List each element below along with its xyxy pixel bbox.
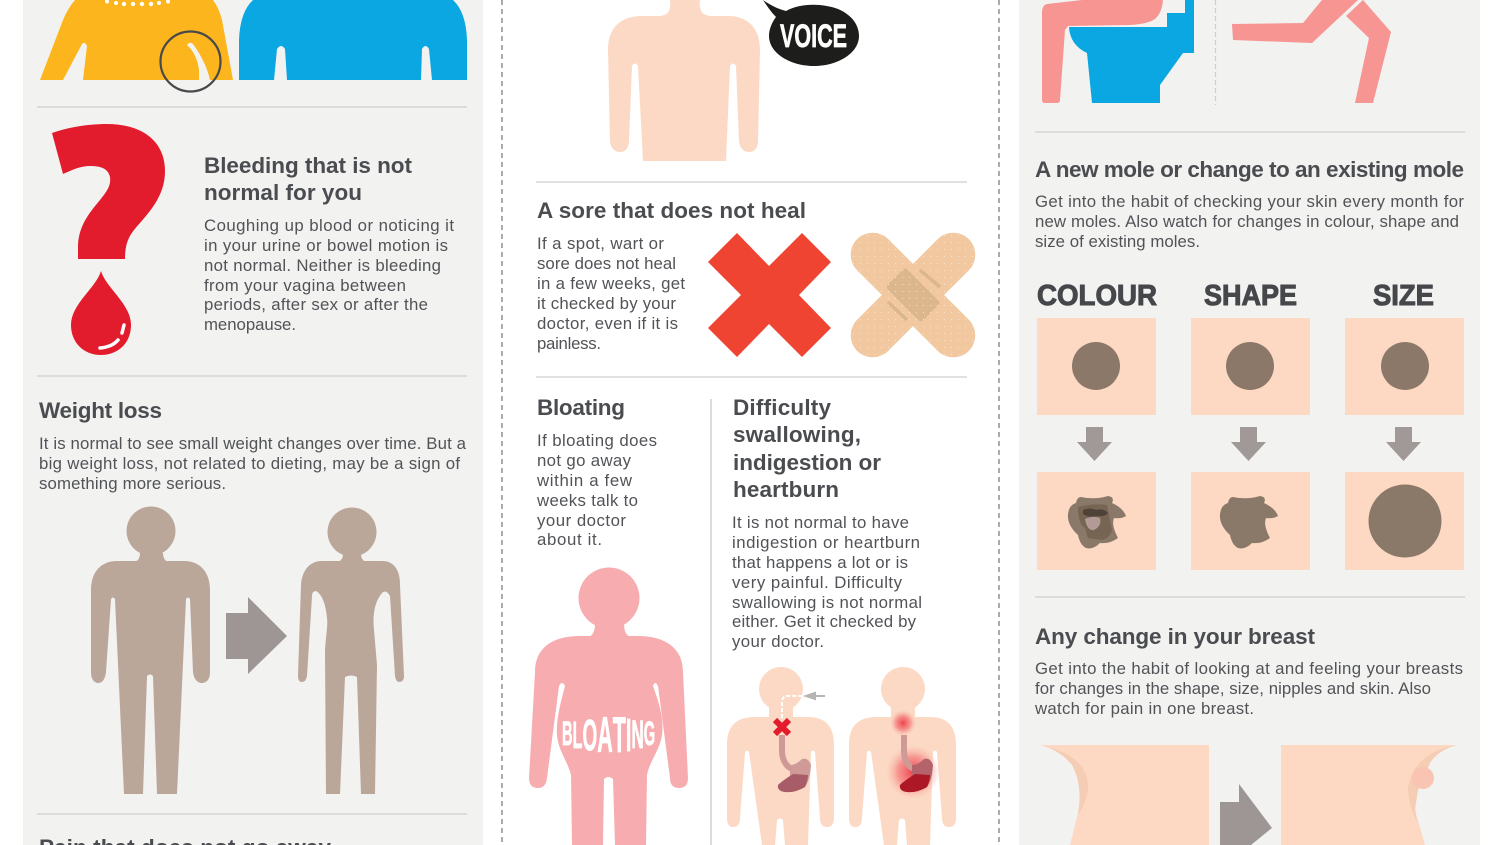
text: breast description: watch for pain in one breast. xyxy=(1034,699,1254,718)
icon: figure with swallowing difficulty xyxy=(727,667,834,845)
icon: crossed plasters xyxy=(842,224,984,366)
icon: bloated figure: N xyxy=(631,712,644,757)
callout: voice speech bubble xyxy=(763,0,859,66)
text: bleeding description: periods, after sex or after the xyxy=(204,295,428,314)
panel: right column xyxy=(1019,0,1480,845)
text: bleeding description xyxy=(204,216,454,334)
panel: left column xyxy=(23,0,483,845)
mole chart: colour xyxy=(1037,280,1157,570)
icon: red cross xyxy=(708,233,831,357)
icon: legs xyxy=(1232,0,1391,103)
text: sore description xyxy=(537,234,685,353)
text: bloating description: weeks talk to xyxy=(536,491,638,510)
text: bloating description: your doctor xyxy=(537,511,626,530)
heading: difficulty swallowing: heartburn xyxy=(733,477,839,502)
callout: voice speech bubble: VOICE xyxy=(780,18,847,54)
text: bloating description: about it. xyxy=(537,530,602,549)
text: bloating description: If bloating does xyxy=(537,431,657,450)
text: bleeding description: menopause. xyxy=(204,315,296,334)
icon: bloated figure: I xyxy=(626,709,631,761)
icon: changed breast with lump xyxy=(1281,745,1457,845)
icon: figure with heartburn xyxy=(849,667,956,845)
mole chart: colour: COLOUR xyxy=(1037,280,1157,312)
heading: mole: A new mole or change to an existing mole xyxy=(1035,157,1464,182)
text: bleeding description: in your urine or bowel motion is xyxy=(204,236,448,255)
arrow: breast change xyxy=(1220,784,1272,845)
heading: difficulty swallowing: indigestion or xyxy=(733,450,881,475)
text: weight loss description xyxy=(39,434,467,493)
text: difficulty swallowing description: very painful. Difficulty xyxy=(732,573,903,592)
text: difficulty swallowing description: that happens a lot or is xyxy=(732,553,908,572)
heading: difficulty swallowing: swallowing, xyxy=(733,422,861,447)
icon: bloated figure: O xyxy=(583,711,597,760)
text: difficulty swallowing description: your doctor. xyxy=(732,632,824,651)
text: difficulty swallowing description: It is not normal to have xyxy=(732,513,909,532)
heading: bloating: Bloating xyxy=(537,395,625,420)
mole chart: shape: SHAPE xyxy=(1204,280,1297,312)
text: breast description: for changes in the shape, size, nipples and skin. Also xyxy=(1035,679,1431,698)
mole chart: size xyxy=(1345,280,1464,570)
icon: red question mark xyxy=(52,124,165,259)
text: bloating description xyxy=(536,431,657,549)
text: difficulty swallowing description: indigestion or heartburn xyxy=(732,533,920,552)
text: bloating description: not go away xyxy=(537,451,632,470)
text: breast description: Get into the habit of looking at and feeling your breasts xyxy=(1035,659,1463,678)
heading: difficulty swallowing: Difficulty xyxy=(733,395,831,420)
icon: bloated figure: B xyxy=(562,714,573,753)
heading: bleeding: normal for you xyxy=(204,180,362,205)
text: difficulty swallowing description: either. Get it checked by xyxy=(732,612,917,631)
text: breast description xyxy=(1034,659,1463,718)
text: mole description: size of existing moles. xyxy=(1035,232,1200,251)
text: sore description: If a spot, wart or xyxy=(537,234,664,253)
icon: bloated figure: T xyxy=(613,708,626,764)
text: weight loss description: something more serious. xyxy=(39,474,226,493)
icon: yellow torso with lump circled xyxy=(40,0,233,92)
icon: larger figure xyxy=(91,506,210,794)
text: sore description: doctor, even if it is xyxy=(537,314,678,333)
mole chart: size: SIZE xyxy=(1373,280,1434,312)
heading: bleeding: Bleeding that is not xyxy=(204,153,412,178)
text: difficulty swallowing description: swallowing is not normal xyxy=(732,593,922,612)
heading: weight loss: Weight loss xyxy=(39,398,162,423)
heading: breast: Any change in your breast xyxy=(1035,624,1316,649)
icon: bloated figure: A xyxy=(597,708,613,764)
text: sore description: in a few weeks, get xyxy=(537,274,685,293)
icon: bloated figure: G xyxy=(644,714,655,753)
heading: sore: A sore that does not heal xyxy=(537,198,806,223)
icon: peach torso xyxy=(608,0,760,161)
icon: bloated figure xyxy=(529,568,688,845)
icon: thinner figure xyxy=(298,508,404,794)
icon: bloated figure: L xyxy=(573,716,583,757)
text: mole description: Get into the habit of checking your skin every month for xyxy=(1035,192,1464,211)
text: weight loss description: It is normal to see small weight changes over time. But a xyxy=(39,434,467,453)
icon: blue torso xyxy=(239,0,467,80)
text: sore description: painless. xyxy=(537,334,601,353)
text: mole description xyxy=(1035,192,1464,251)
mole chart: shape xyxy=(1191,280,1310,570)
text: bleeding description: Coughing up blood or noticing it xyxy=(204,216,454,235)
text: bleeding description: from your vagina between xyxy=(204,276,406,295)
text: bloating description: within a few xyxy=(536,471,633,490)
icon: blood drop xyxy=(71,271,131,355)
text: mole description: new moles. Also watch for changes in colour, shape and xyxy=(1035,212,1459,231)
arrow: weight change xyxy=(226,597,287,674)
icon: person on toilet xyxy=(1042,0,1194,103)
text: difficulty swallowing description xyxy=(732,513,922,651)
icon: normal breast xyxy=(1040,745,1209,845)
text: weight loss description: big weight loss, not related to dieting, may be a sign of xyxy=(39,454,460,473)
text: sore description: sore does not heal xyxy=(537,254,676,273)
text: sore description: it checked by your xyxy=(537,294,676,313)
text: bleeding description: not normal. Neither is bleeding xyxy=(204,256,441,275)
panel: middle column xyxy=(502,0,999,845)
